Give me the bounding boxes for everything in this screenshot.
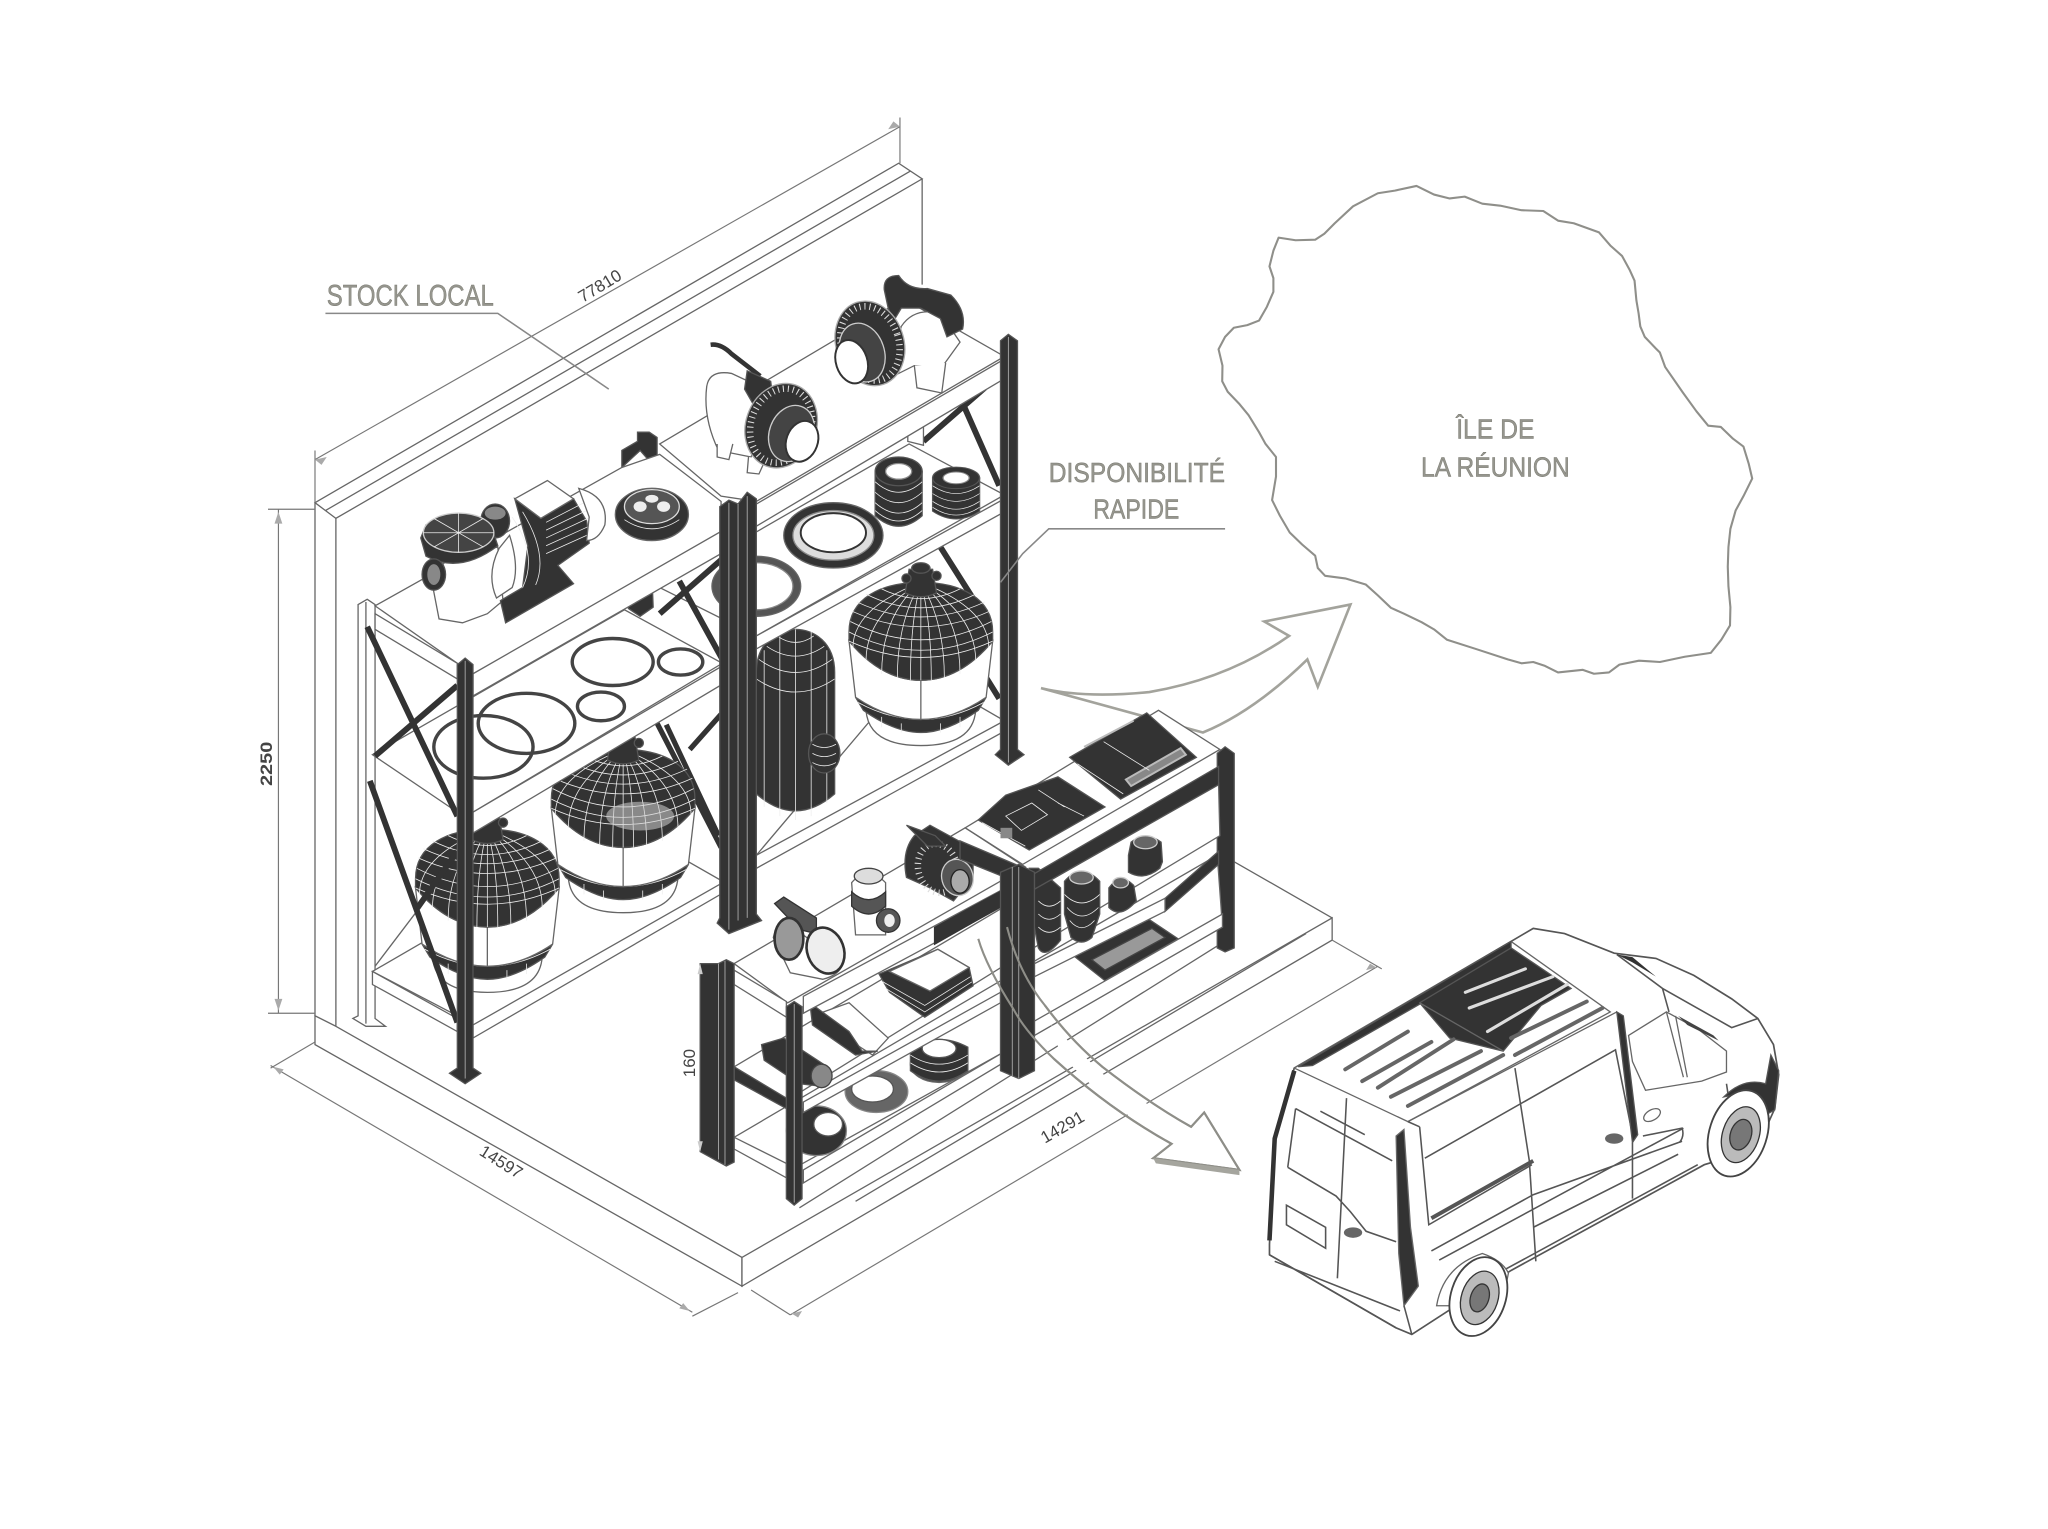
low shelf lower decks bbox=[734, 783, 1222, 1173]
stacked gaskets bbox=[875, 457, 922, 526]
o-rings on left middle deck bbox=[434, 638, 703, 778]
low shelf rear post bbox=[1217, 747, 1234, 952]
dimension: front length: 14291 bbox=[1037, 1107, 1088, 1147]
seal low shelf bbox=[845, 1071, 908, 1112]
seal ring behind post bbox=[712, 556, 801, 616]
dimension 160: 160 bbox=[680, 1049, 699, 1077]
low shelf beams bbox=[734, 766, 1219, 1183]
rack post front left bbox=[449, 658, 481, 1084]
rack beams bbox=[473, 359, 1004, 1038]
middle decks bbox=[372, 444, 1004, 812]
delivery van bbox=[1269, 928, 1779, 1344]
sand filter tank left bbox=[416, 810, 559, 992]
dimension: front length bbox=[751, 940, 1382, 1317]
lower middle bracing bbox=[654, 714, 721, 847]
rack post front right bbox=[995, 334, 1024, 765]
control board rear bbox=[1070, 713, 1196, 799]
large seal ring bbox=[784, 503, 883, 568]
label: Île de La Réunion bbox=[1421, 414, 1570, 483]
end beam top left bbox=[375, 614, 457, 679]
serial connector module bbox=[1074, 918, 1178, 981]
low shelf dark side panel bbox=[698, 960, 734, 1166]
arrow: towards island bbox=[1041, 605, 1350, 733]
small valve on mid deck bbox=[810, 1003, 888, 1055]
low shelf post front bbox=[786, 1001, 802, 1205]
stack of square plates bbox=[879, 949, 973, 1017]
ball valve on deck light bbox=[773, 897, 851, 979]
highlight on middle tank bbox=[606, 802, 674, 830]
dimension: height bbox=[257, 509, 315, 1013]
low shelf unit bbox=[680, 710, 1234, 1205]
pool pump bbox=[421, 481, 605, 623]
large rack bbox=[353, 276, 1024, 1084]
label: Île de La Réunion: LA RÉUNION bbox=[1421, 452, 1570, 483]
van front wheel bbox=[1697, 1082, 1779, 1184]
sand filter tank right bbox=[849, 563, 993, 746]
dimension: height: 2250 bbox=[257, 742, 276, 786]
low shelf post double bbox=[1000, 864, 1034, 1079]
union valve lower bbox=[762, 1038, 832, 1088]
van cab window and windscreen bbox=[1617, 954, 1758, 1136]
bottom decks bbox=[372, 669, 1004, 1032]
dimension: wall length: 77810 bbox=[575, 266, 625, 306]
label: disponibilité rapide with leader bbox=[1000, 457, 1225, 582]
cylindrical filter tank bbox=[756, 629, 840, 820]
ball valve rear bbox=[824, 276, 963, 395]
sand filter tank middle bbox=[551, 730, 695, 913]
control board front bbox=[978, 777, 1105, 850]
low shelf top deck bbox=[734, 710, 1220, 1003]
top decks bbox=[375, 299, 1004, 676]
van roof bbox=[1294, 941, 1617, 1122]
dark seal low shelf bbox=[786, 1106, 846, 1156]
island outline bbox=[1219, 186, 1752, 674]
dimension: wall length bbox=[315, 118, 900, 503]
dimension: depth: 14597 bbox=[476, 1142, 526, 1183]
label: disponibilité rapide with leader: DISPONIBILITÉ bbox=[1049, 457, 1225, 488]
stacked gaskets small bbox=[933, 467, 980, 519]
van body bbox=[1269, 928, 1779, 1334]
arrow: towards van bbox=[978, 927, 1239, 1175]
threaded fittings bbox=[1029, 836, 1162, 952]
rack post middle double bbox=[717, 492, 762, 934]
wall with plinth bbox=[315, 163, 922, 1026]
ball valve white handle front bbox=[706, 345, 829, 478]
rear beams bbox=[1034, 851, 1222, 1035]
label: Île de La Réunion: ÎLE DE bbox=[1455, 414, 1535, 445]
van side panels bbox=[1420, 1012, 1698, 1270]
pump lid disc bbox=[615, 488, 688, 541]
union fitting bbox=[852, 868, 900, 935]
left frame bracing bbox=[367, 627, 457, 1022]
label: stock local with leader: STOCK LOCAL bbox=[327, 280, 494, 313]
dimension: depth bbox=[271, 1042, 738, 1316]
ball valve on deck dark bbox=[905, 825, 977, 901]
gasket stack low shelf bbox=[910, 1039, 968, 1082]
label: stock local with leader bbox=[325, 280, 609, 389]
van front wheel arch bbox=[1724, 1055, 1779, 1116]
floor slab bbox=[315, 862, 1332, 1286]
rack back frames and bracing bbox=[353, 388, 999, 1026]
van rear wheel bbox=[1437, 1250, 1517, 1344]
van rear doors bbox=[1269, 1071, 1420, 1334]
upper middle bracing bbox=[628, 559, 722, 659]
label: disponibilité rapide with leader: RAPIDE bbox=[1093, 493, 1179, 524]
